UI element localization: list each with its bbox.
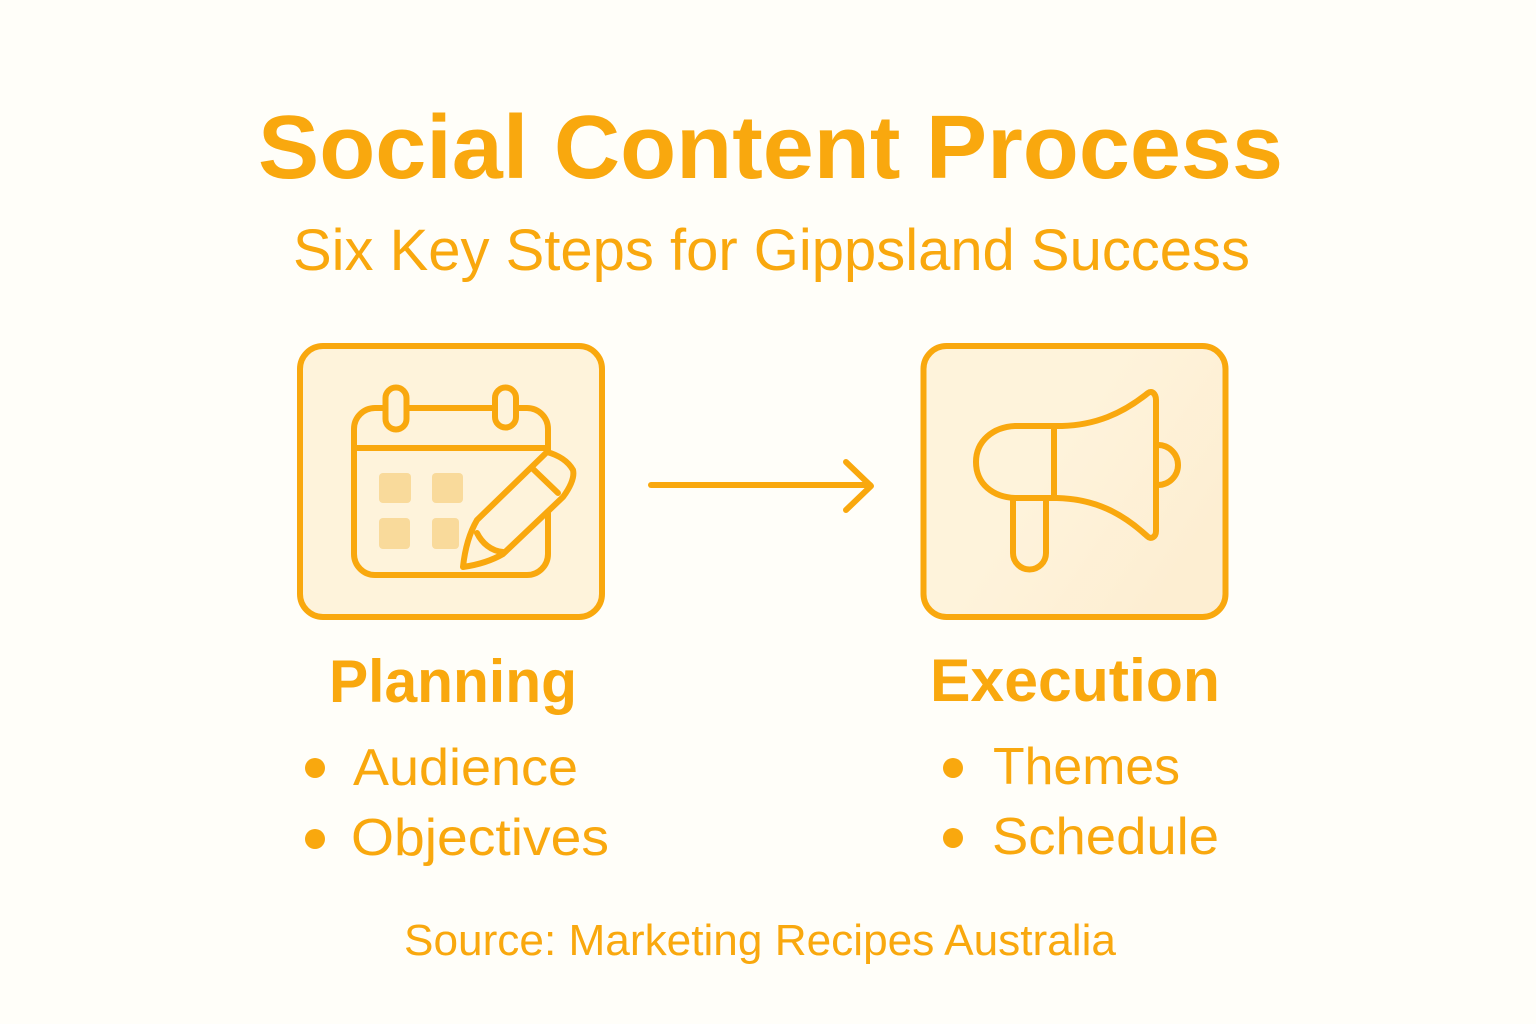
list: planning: Objectives xyxy=(351,809,609,867)
arrow xyxy=(651,462,871,510)
icon: calendar xyxy=(354,388,548,575)
title: Social Content Process xyxy=(258,98,1283,198)
list: execution xyxy=(943,738,1219,866)
icon: pencil xyxy=(463,452,573,567)
source note: Source: Marketing Recipes Australia xyxy=(404,916,1117,965)
heading: planning: Planning xyxy=(329,648,577,715)
list: planning xyxy=(305,739,609,867)
panel: execution icon xyxy=(924,346,1226,617)
list: planning: Audience xyxy=(353,739,578,797)
subtitle: Six Key Steps for Gippsland Success xyxy=(293,218,1250,283)
list: execution: Themes xyxy=(993,738,1180,796)
icon: megaphone xyxy=(976,392,1178,570)
heading: execution: Execution xyxy=(930,647,1220,714)
list: execution: Schedule xyxy=(992,808,1219,866)
panel: planning icon xyxy=(300,346,602,617)
